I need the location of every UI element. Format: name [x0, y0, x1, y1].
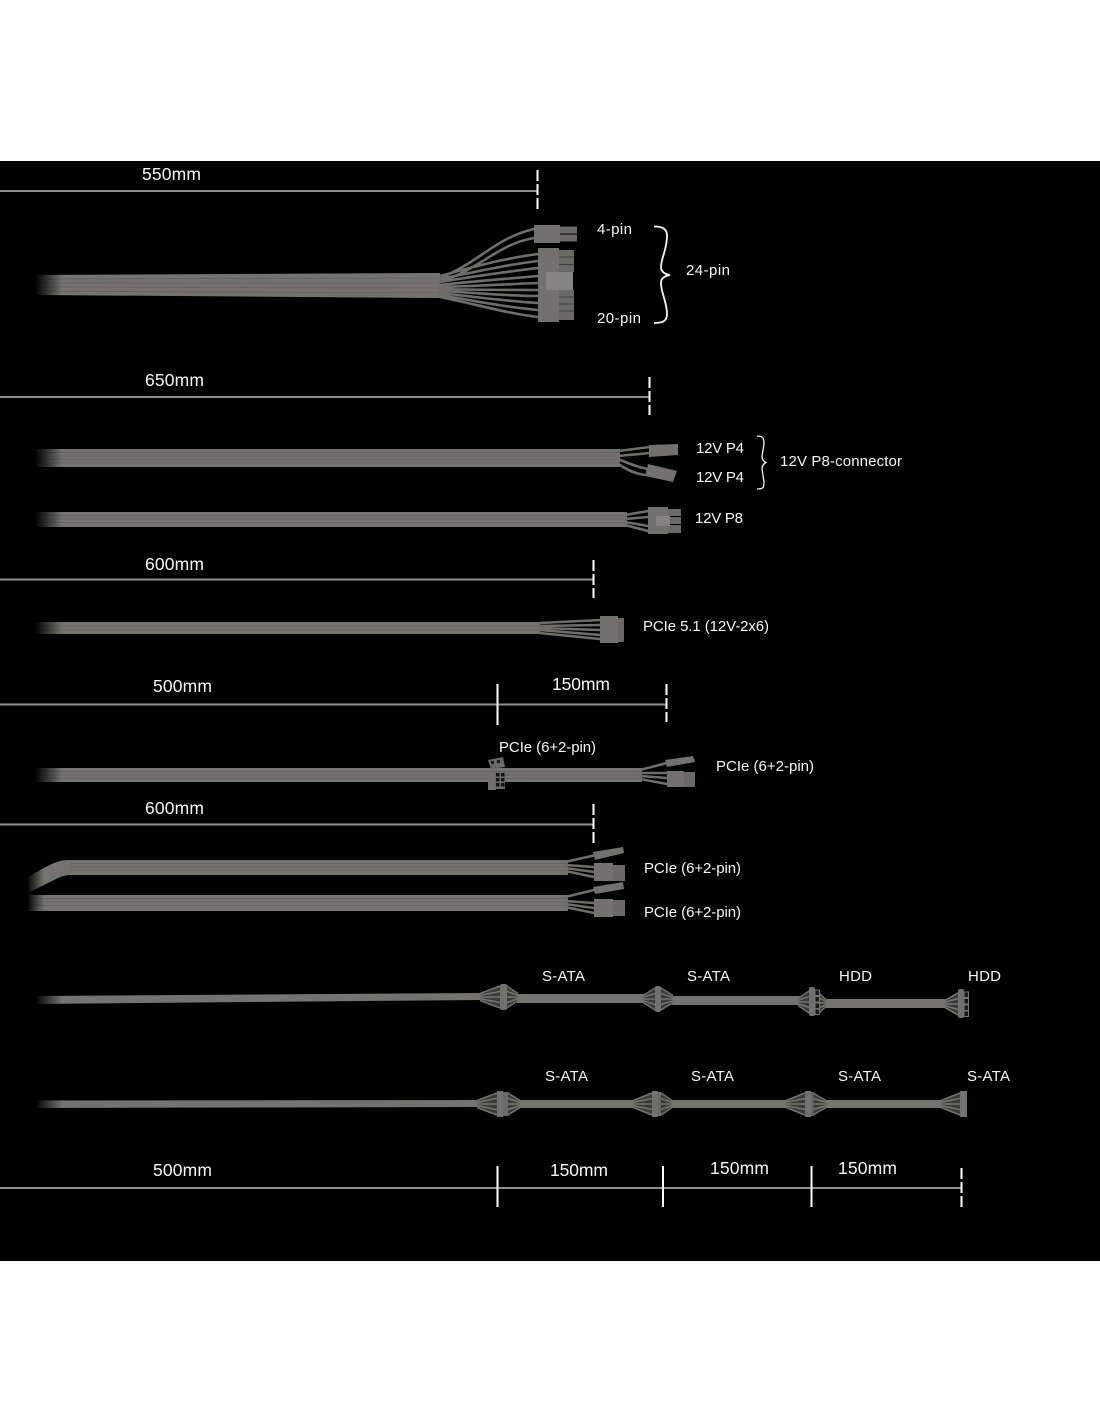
label: 24-pin: 24-pin — [686, 262, 730, 279]
connector: bent top — [593, 847, 624, 860]
dimension: 600mm upper: 600mm — [145, 554, 204, 574]
label: S-ATA: S-ATA — [691, 1068, 734, 1085]
dimension: bottom 500/150/150/150mm: 150mm — [838, 1158, 897, 1178]
dimension: 500mm + 150mm — [0, 674, 666, 725]
connector: S-ATA C — [786, 1091, 826, 1117]
connector: inline PCIe — [488, 757, 505, 790]
label: PCIe 5.1: PCIe 5.1 (12V-2x6) — [643, 618, 769, 635]
cable: 24-pin ATX — [30, 225, 577, 322]
connector: bent lower — [594, 863, 625, 881]
connector: PCIe end lower — [667, 771, 695, 787]
label: 12V P8: 12V P8 — [695, 510, 743, 527]
dimension: 550mm: 550mm — [142, 164, 201, 184]
connector: lower top — [593, 882, 624, 894]
connector: 20-pin — [538, 248, 574, 322]
connector: P4 lower — [645, 464, 677, 482]
cable: 12V P8 — [30, 507, 681, 534]
connector: S-ATA 1 — [480, 984, 518, 1010]
cable: PCIe 5.1 — [30, 616, 624, 643]
connector: S-ATA D — [941, 1091, 967, 1117]
dimension: 500mm + 150mm: 500mm — [153, 676, 212, 696]
black panel background — [0, 161, 1100, 1261]
connector: PCIe 5.1 — [600, 616, 624, 643]
dimension: 650mm: 650mm — [145, 370, 204, 390]
cable: PCIe bent — [24, 847, 625, 896]
label: S-ATA: S-ATA — [542, 968, 585, 985]
label: 12V P4 lower: 12V P4 — [696, 469, 744, 486]
connector: lower bottom — [594, 899, 625, 917]
dimension: bottom 500/150/150/150mm — [0, 1158, 962, 1207]
label: HDD: HDD — [839, 968, 872, 985]
brace: 24-pin — [654, 226, 670, 323]
connector: P8 — [648, 507, 681, 534]
connector: S-ATA B — [633, 1091, 672, 1117]
cable: S-ATA / HDD chain — [30, 984, 968, 1018]
label: S-ATA: S-ATA — [687, 968, 730, 985]
label: 4-pin: 4-pin — [597, 221, 632, 238]
label: 20-pin: 20-pin — [597, 310, 641, 327]
brace: P8 connector — [757, 436, 766, 489]
label: S-ATA: S-ATA — [545, 1068, 588, 1085]
label: S-ATA: S-ATA — [838, 1068, 881, 1085]
dimension: 600mm lower: 600mm — [145, 798, 204, 818]
label: PCIe end: PCIe (6+2-pin) — [716, 758, 814, 775]
connector: S-ATA 2 — [643, 986, 673, 1012]
cable: PCIe 6+2 daisy chain — [30, 756, 695, 790]
label: S-ATA: S-ATA — [967, 1068, 1010, 1085]
cable: PCIe lower — [24, 882, 625, 917]
label: 12V P8-connector: 12V P8-connector — [780, 453, 902, 470]
label: HDD: HDD — [968, 968, 1001, 985]
connector: S-ATA A — [477, 1091, 520, 1117]
cable: 12V P4 dual — [30, 444, 678, 482]
dimension: bottom 500/150/150/150mm: 500mm — [153, 1160, 212, 1180]
label: PCIe bent: PCIe (6+2-pin) — [644, 860, 741, 877]
connector: P4 upper — [649, 444, 678, 457]
connector: HDD 1 — [798, 987, 826, 1016]
dimension: bottom 500/150/150/150mm: 150mm — [710, 1158, 769, 1178]
dimension: bottom 500/150/150/150mm: 150mm — [550, 1160, 608, 1180]
cable: S-ATA chain — [30, 1091, 967, 1117]
label: inline PCIe: PCIe (6+2-pin) — [499, 739, 596, 756]
connector: PCIe end upper — [665, 756, 695, 767]
label: PCIe lower: PCIe (6+2-pin) — [644, 904, 741, 921]
label: 12V P4 upper: 12V P4 — [696, 440, 744, 457]
connector: 4-pin — [534, 225, 577, 243]
connector: HDD 2 — [945, 989, 968, 1018]
dimension: 500mm + 150mm: 150mm — [552, 674, 610, 694]
